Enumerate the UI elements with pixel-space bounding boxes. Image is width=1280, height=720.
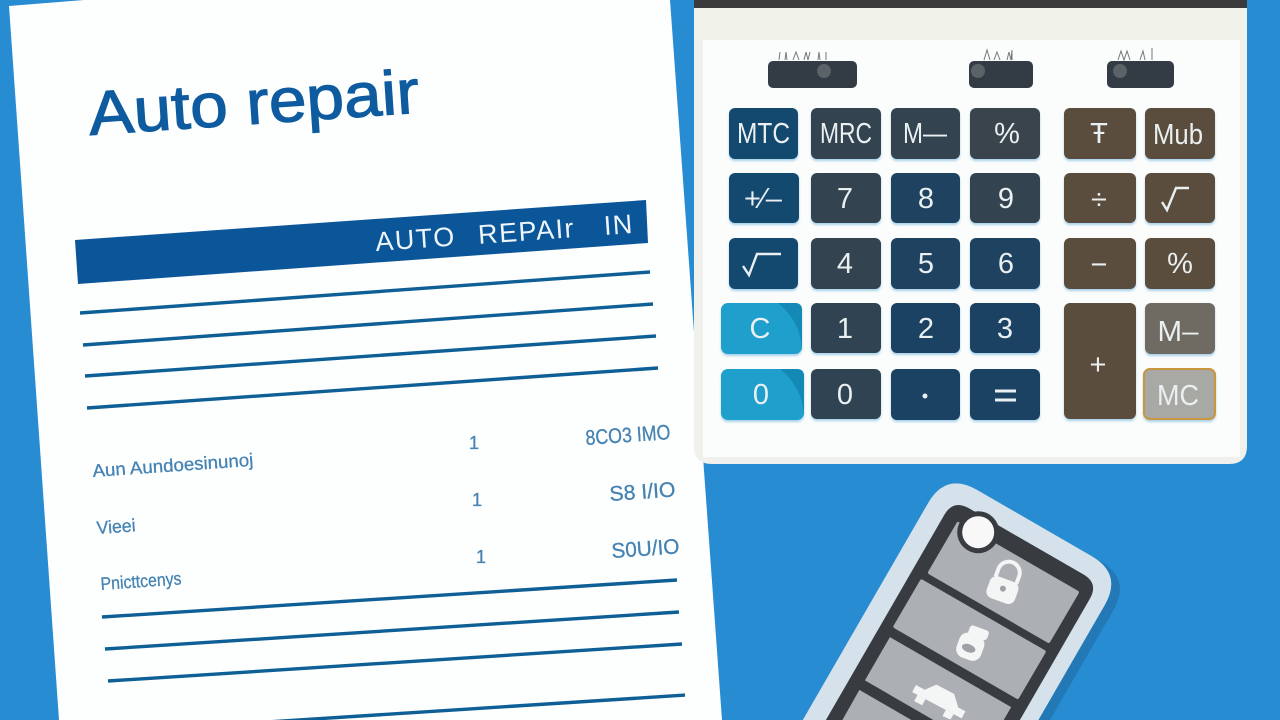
line items: 1 xyxy=(472,490,482,510)
fob key ring hole xyxy=(957,511,999,553)
line items: S8 I/IO xyxy=(609,478,676,506)
key point xyxy=(891,369,960,420)
key 2: 2 xyxy=(918,313,934,345)
line items: S0U/IO xyxy=(611,535,680,563)
key equals xyxy=(970,369,1040,420)
key minus: − xyxy=(1091,249,1107,281)
line items: 8CO3 IMO xyxy=(585,421,671,450)
key 6: 6 xyxy=(998,248,1014,280)
key 6 xyxy=(970,238,1040,289)
key MTC xyxy=(729,108,798,159)
upper text lines xyxy=(80,272,658,408)
icon: unlocked padlock xyxy=(954,623,990,663)
line items: 1 xyxy=(476,547,486,567)
key plus xyxy=(1064,303,1136,419)
key 5: 5 xyxy=(918,248,934,280)
key plus minus xyxy=(729,173,799,223)
fob button 3 xyxy=(865,637,1011,720)
line items: Vieei xyxy=(96,515,136,538)
banner: auto repair in xyxy=(75,200,648,284)
line items xyxy=(92,421,680,594)
fob shadow xyxy=(900,495,1120,720)
key 0 cyan xyxy=(721,369,804,420)
key 0 xyxy=(811,369,881,419)
key 7: 7 xyxy=(837,183,853,215)
key 9 xyxy=(970,173,1040,223)
banner: auto repair in: IN xyxy=(603,209,635,241)
key minus xyxy=(1064,238,1136,289)
fob button 4 xyxy=(842,690,911,720)
line items: Aun Aundoesinunoj xyxy=(92,450,254,481)
key 1: 1 xyxy=(837,313,853,345)
key MTC: MTC xyxy=(737,118,790,150)
key MC xyxy=(1144,369,1215,419)
key MUB: Mub xyxy=(1153,119,1203,151)
banner: auto repair in: AUTO xyxy=(374,221,457,257)
key 8: 8 xyxy=(918,183,934,215)
key M minus: M– xyxy=(1158,316,1199,348)
banner: auto repair in: REPAIr xyxy=(477,213,576,250)
key MC: MC xyxy=(1157,380,1199,412)
key MRC: MRC xyxy=(820,118,872,150)
fob button 1 xyxy=(930,524,1077,641)
key divide xyxy=(1064,173,1136,223)
key tax: Ŧ xyxy=(1090,118,1108,150)
key 2 xyxy=(891,303,960,353)
key percent T: % xyxy=(1167,248,1193,280)
key 4 xyxy=(811,238,881,289)
panel: auto repair document xyxy=(9,0,722,720)
key square root xyxy=(1145,173,1215,223)
key M- xyxy=(891,108,960,159)
key 8 xyxy=(891,173,960,223)
key 0: 0 xyxy=(837,379,853,411)
key 4: 4 xyxy=(837,248,853,280)
lower text lines xyxy=(102,580,685,720)
key percent xyxy=(970,108,1040,159)
keypad xyxy=(721,108,1215,420)
icon: car trunk xyxy=(912,685,965,720)
fob dark inner casing xyxy=(826,505,1093,720)
icon: car key fob xyxy=(803,483,1120,720)
key root blue xyxy=(729,238,798,289)
key tax xyxy=(1064,108,1136,159)
line items: Pnicttcenys xyxy=(100,568,182,594)
key 1 xyxy=(811,303,881,353)
icon: locked padlock xyxy=(984,557,1027,606)
line items: 1 xyxy=(469,433,479,453)
fob button 2 xyxy=(895,582,1044,697)
key plus: + xyxy=(1090,349,1106,381)
key C: C xyxy=(750,313,770,345)
switches xyxy=(768,48,1174,88)
key 5 xyxy=(891,238,960,289)
key 3 xyxy=(970,303,1040,353)
key percent: % xyxy=(994,118,1020,150)
panel: calculator xyxy=(694,0,1247,464)
key 0 cyan: 0 xyxy=(753,379,769,411)
key 9: 9 xyxy=(998,183,1014,215)
key 3: 3 xyxy=(997,313,1013,345)
key plus minus: +⁄– xyxy=(744,183,783,215)
key M minus xyxy=(1145,303,1215,354)
fob body xyxy=(803,483,1111,720)
key M-: M— xyxy=(903,118,947,150)
heading: Auto repair: Auto repair xyxy=(86,58,421,149)
key MRC xyxy=(811,108,881,159)
key 7 xyxy=(811,173,881,223)
key MUB xyxy=(1145,108,1215,159)
key divide: ÷ xyxy=(1091,184,1107,216)
key C xyxy=(721,303,802,354)
key percent T xyxy=(1145,238,1215,289)
